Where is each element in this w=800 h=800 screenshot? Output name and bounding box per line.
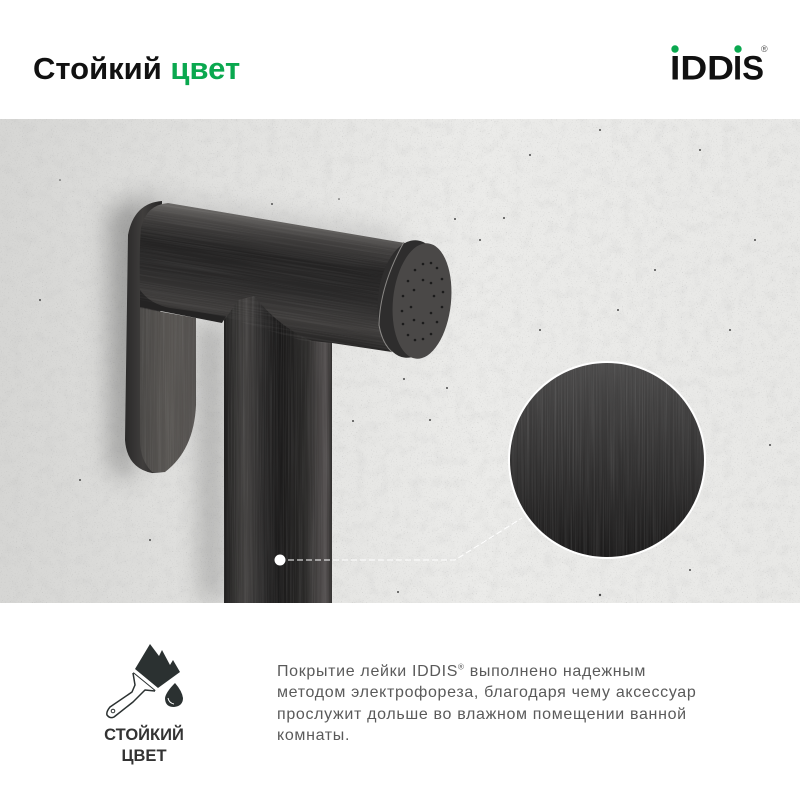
- icon label: СТОЙКИЙ: [104, 726, 184, 744]
- description text: прослужит дольше во влажном помещении ванной: [277, 706, 687, 723]
- description text: методом электрофореза, благодаря чему аксессуар: [277, 684, 696, 701]
- icon label: [104, 724, 184, 765]
- concrete wall texture: [0, 119, 800, 603]
- description text: Покрытие лейки IDDIS® выполнено надежным: [277, 663, 646, 680]
- logo: IDDIS: [670, 44, 768, 84]
- panel: product photo on concrete wall: [0, 119, 800, 603]
- hygienic shower head: [119, 174, 457, 603]
- lever plate: [140, 308, 196, 472]
- callout pointer: dot and dashed line: [274, 518, 522, 566]
- horizontal cylinder: [140, 203, 405, 352]
- icon: paint brush with drop: [106, 644, 183, 718]
- description text: комнаты.: [277, 727, 350, 744]
- icon label: ЦВЕТ: [121, 747, 167, 765]
- description text: [277, 663, 696, 744]
- wall plate outer edge: [125, 201, 165, 473]
- logo: IDDIS: ®: [761, 44, 768, 54]
- wall shadow behind the product: [108, 190, 400, 600]
- handle stem: [224, 290, 332, 603]
- title: Стойкий цвет: [33, 51, 240, 86]
- spray head end cap: [372, 237, 457, 362]
- callout: brushed metal close-up: [508, 361, 706, 559]
